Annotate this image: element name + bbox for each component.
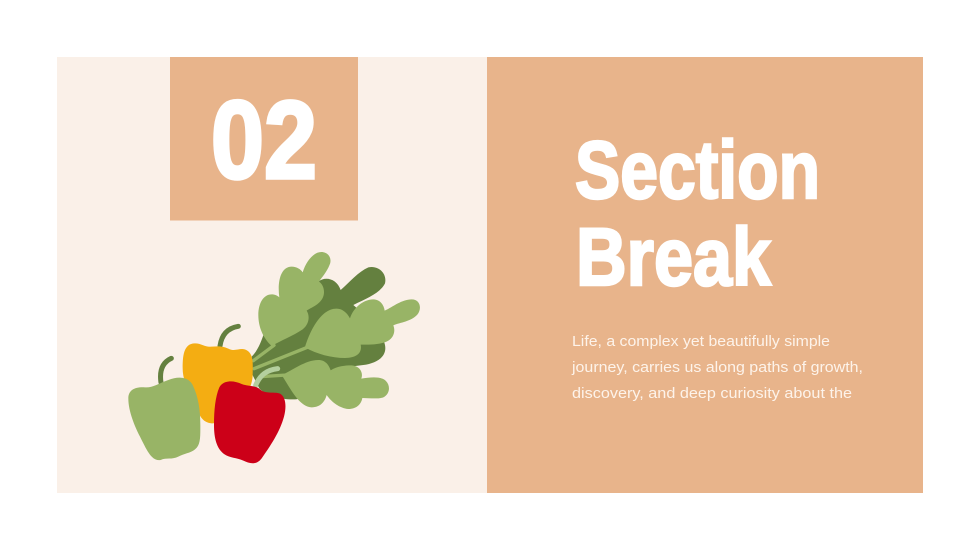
icon: green pepper bbox=[128, 378, 200, 460]
icon: light green leaf stems bbox=[253, 345, 307, 377]
body text: discovery, and deep curiosity about the bbox=[572, 386, 852, 402]
heading: Section Break bbox=[575, 125, 820, 303]
icon: dark green leaves bbox=[252, 267, 385, 399]
body text: Life, a complex yet beautifully simple bbox=[572, 334, 830, 350]
icon: top leaf bbox=[258, 252, 330, 346]
icon: lower leaf bbox=[282, 360, 389, 409]
icon: yellow pepper stem bbox=[220, 326, 238, 346]
body text bbox=[571, 334, 863, 402]
icon: pale stem bbox=[256, 369, 278, 385]
illustration: peppers and leafy greens bbox=[128, 252, 420, 463]
icon: green pepper stem bbox=[161, 358, 171, 383]
panel: right tan background bbox=[487, 57, 923, 493]
icon: red pepper bbox=[214, 381, 285, 463]
heading: Section Break: Break bbox=[576, 212, 771, 303]
heading: Section Break: Section bbox=[575, 125, 820, 216]
body text: journey, carries us along paths of growth, bbox=[571, 360, 863, 376]
icon: middle leaf bbox=[305, 299, 420, 358]
panel: left cream background bbox=[57, 57, 488, 493]
section number: 02 bbox=[211, 79, 317, 202]
icon: yellow pepper bbox=[183, 343, 253, 423]
panel: section number block bbox=[170, 57, 358, 220]
